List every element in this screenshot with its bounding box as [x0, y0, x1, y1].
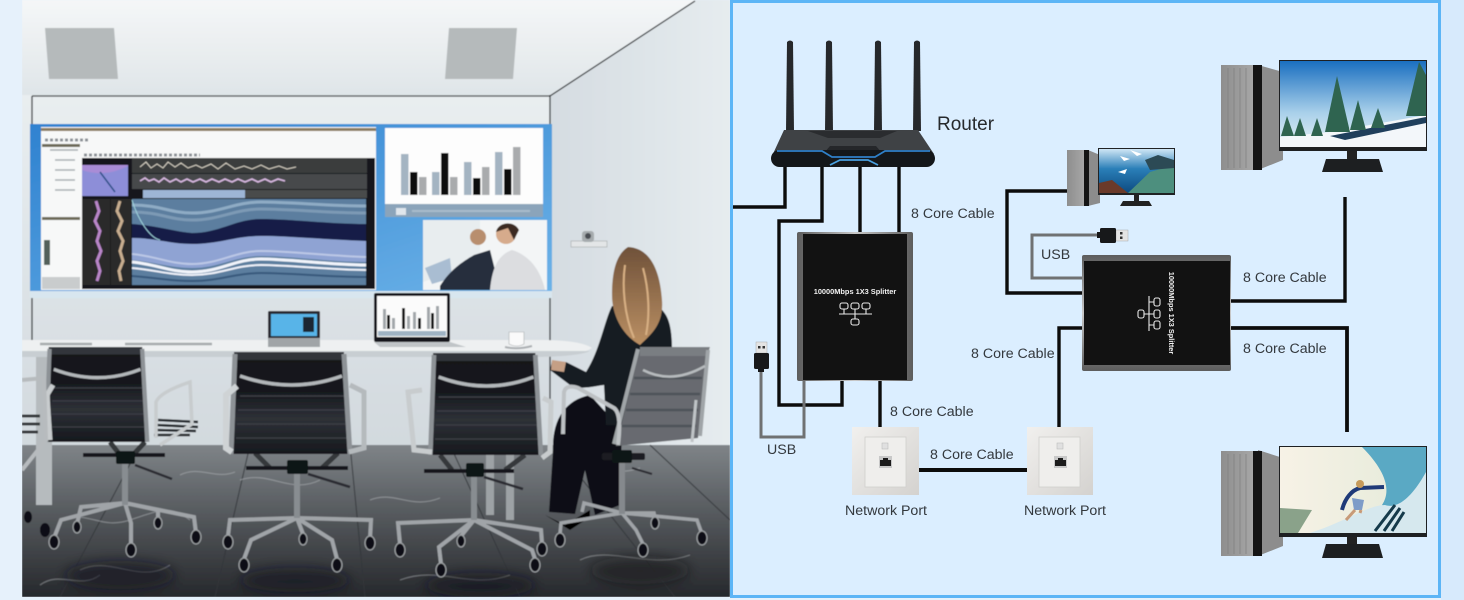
presentation bar chart: [385, 128, 543, 217]
office chair 1: [46, 347, 201, 557]
ceiling light right: [445, 28, 517, 79]
tablet on table: [268, 311, 320, 347]
coffee cup: [505, 332, 532, 348]
splitter model text: 10000Mbps 1X3 Splitter: [814, 287, 896, 296]
cable label: top: 8 Core Cable: [911, 206, 995, 222]
USB plug left: [754, 342, 769, 372]
router: [771, 40, 935, 167]
panel: network wiring diagram: [732, 0, 1464, 600]
office chair 3: [395, 353, 551, 577]
ceiling corner lines: [32, 1, 695, 445]
laptop with bar chart: [374, 293, 466, 347]
panel: meeting room photo: [22, 0, 730, 597]
partial chair at left edge: [22, 378, 50, 537]
ceiling: [22, 0, 730, 96]
floor: [22, 445, 730, 597]
wall mounted camera: [571, 231, 607, 247]
cable label: upper right: 8 Core Cable: [1243, 270, 1327, 286]
network port label right: Network Port: [1024, 503, 1106, 519]
cable label: between ports: 8 Core Cable: [930, 447, 1014, 463]
right wall: [550, 0, 730, 450]
woman seated: [545, 247, 672, 530]
large desktop computer top: [1221, 60, 1427, 172]
panel background and border: [732, 2, 1440, 596]
office chair 4: [555, 347, 710, 557]
cable label: below left splitter: 8 Core Cable: [890, 404, 974, 420]
USB plug right: [1097, 228, 1128, 243]
USB label left: USB: [767, 442, 796, 458]
seismic bands: [132, 199, 366, 285]
small desktop computer: [1067, 148, 1175, 206]
splitter network icon: [839, 303, 872, 325]
splitter network icon rotated: [1138, 296, 1160, 331]
conference table: [22, 339, 592, 352]
dark plot area: [82, 158, 375, 289]
label: router: Router: [937, 114, 995, 135]
cable label: lower right: 8 Core Cable: [1243, 341, 1327, 357]
software window: [41, 127, 376, 290]
chair slats behind chair 1: [154, 420, 198, 435]
floor plank lines: [40, 445, 730, 597]
splitter left: [797, 232, 913, 381]
back wall: [22, 95, 552, 450]
splitter model text rotated: 10000Mbps 1X3 Splitter: [1167, 272, 1176, 354]
video call photo: [423, 220, 547, 290]
splitter right: [1082, 255, 1231, 371]
cable label: left of right splitter: 8 Core Cable: [971, 346, 1055, 362]
USB label right: USB: [1041, 247, 1070, 263]
large desktop computer bottom: [1221, 446, 1427, 558]
floor reflections: [65, 556, 690, 597]
network wall port left: [852, 427, 919, 495]
ceiling light left: [45, 28, 118, 79]
black network cables: [733, 166, 1347, 470]
network port label left: Network Port: [845, 503, 927, 519]
network wall port right: [1027, 427, 1093, 495]
right margin strip: [1441, 0, 1464, 600]
wall screen: [30, 124, 552, 298]
grey USB cables: [761, 235, 1100, 437]
table leg: [36, 355, 52, 505]
office chair 2: [223, 352, 375, 572]
